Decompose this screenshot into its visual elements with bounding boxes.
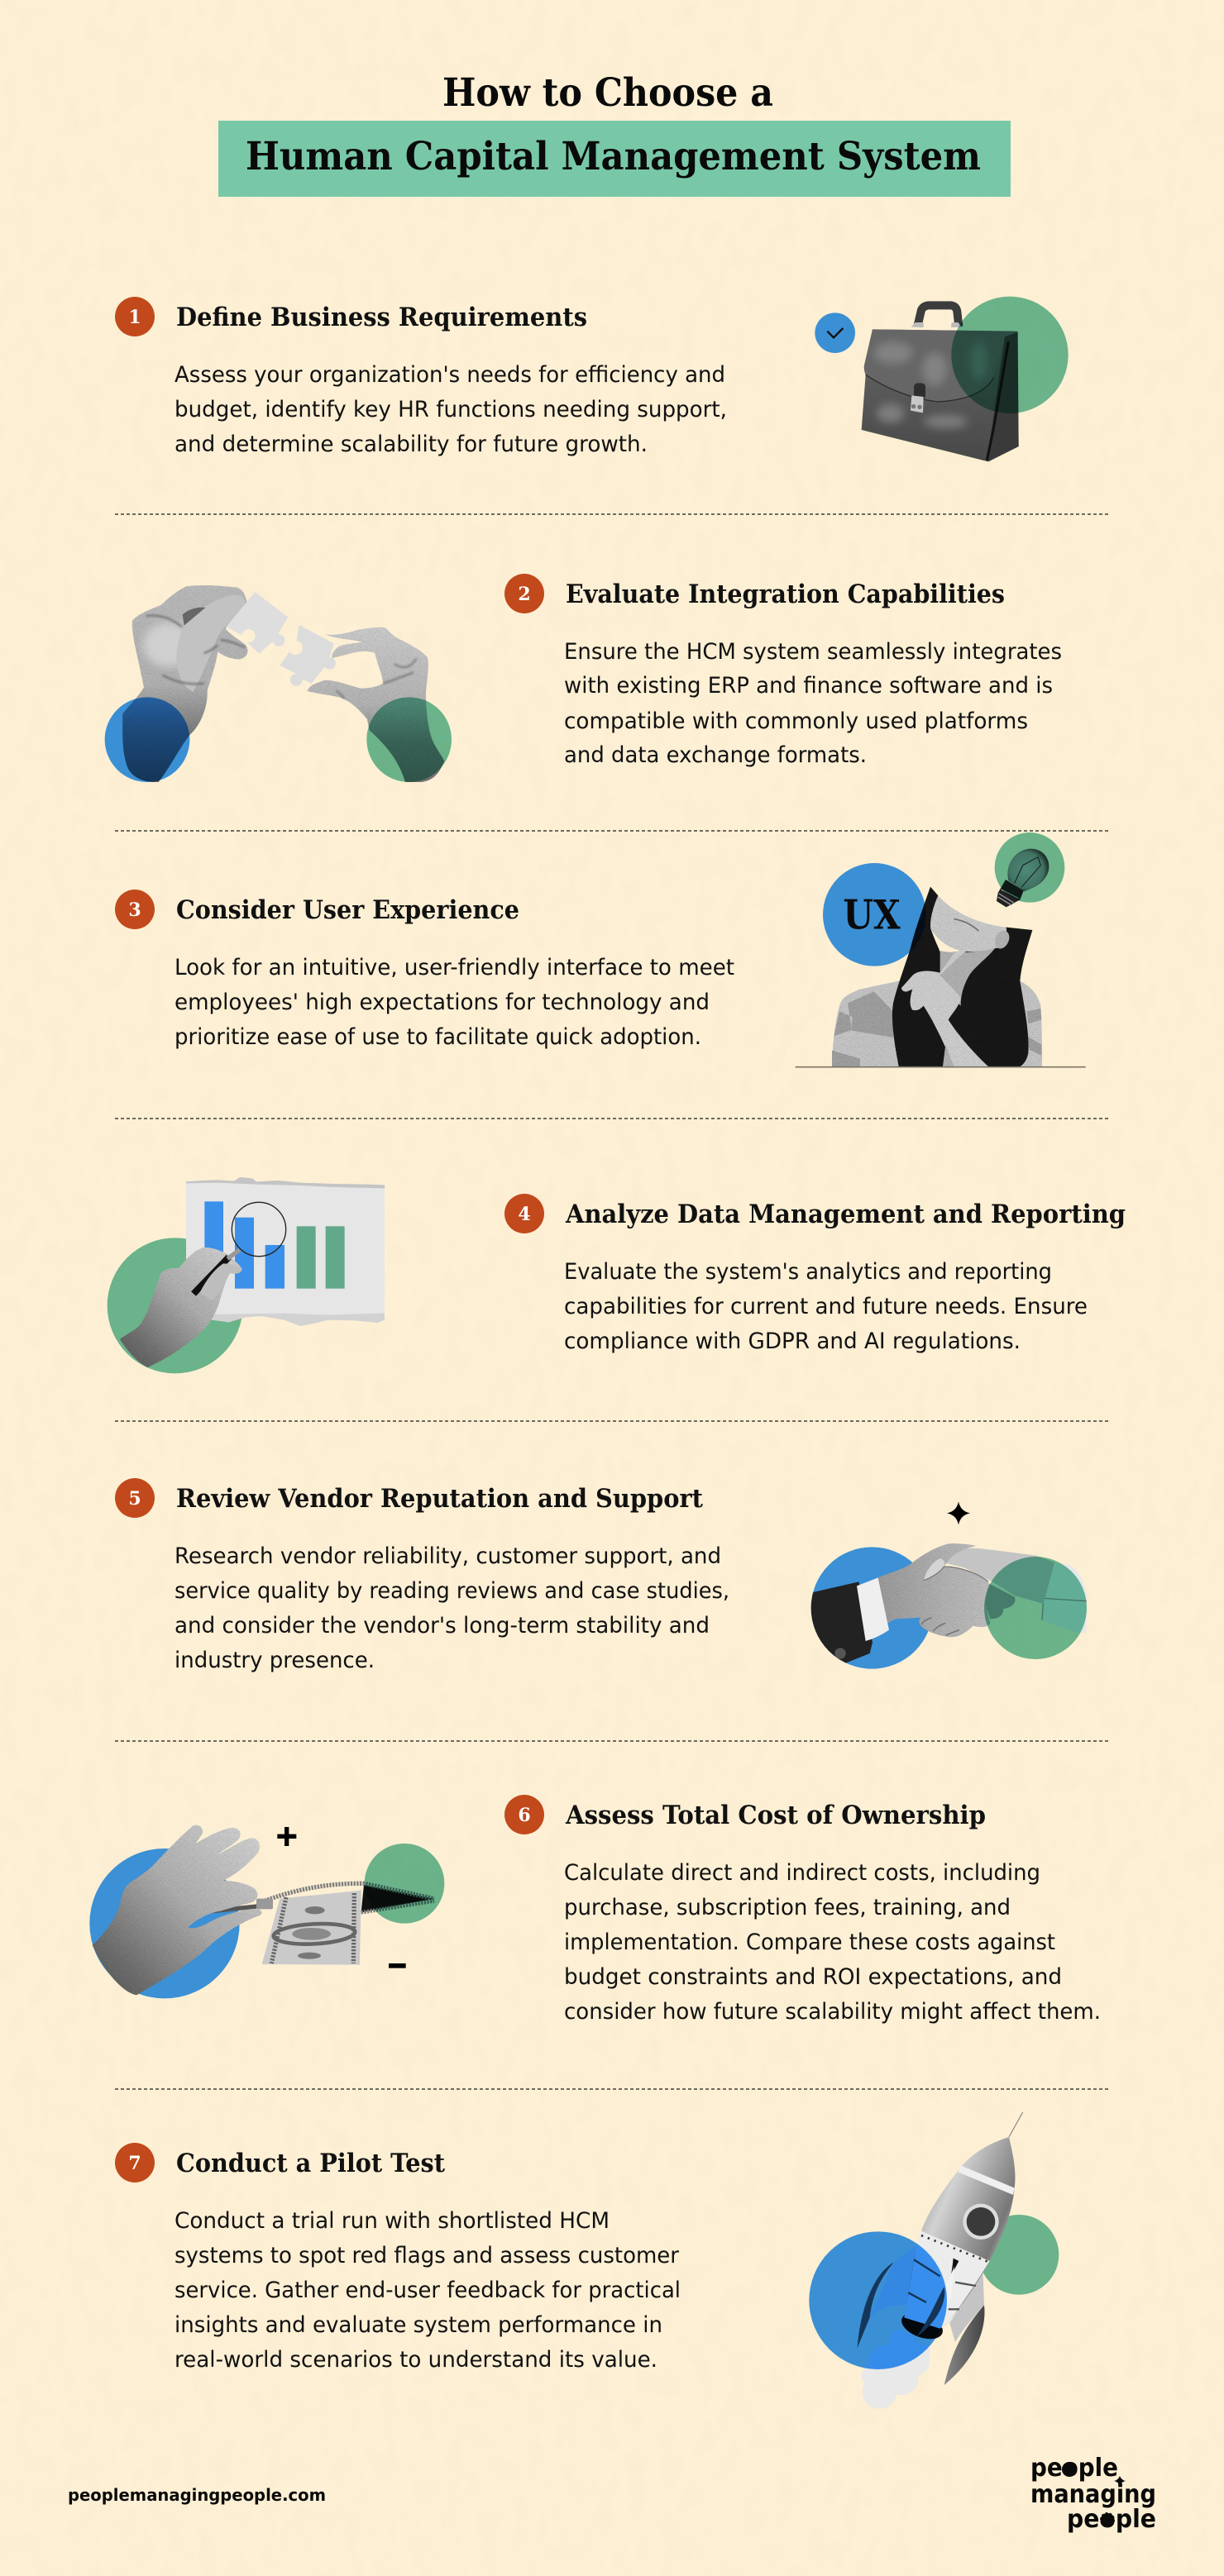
heading step 6: Assess Total Cost of Ownership xyxy=(565,1801,986,1830)
number badge 4 xyxy=(504,1194,544,1233)
illustration: rocket launching xyxy=(809,2112,1059,2409)
heading step 2: Evaluate Integration Capabilities xyxy=(566,580,1005,609)
illustration: two hands joining puzzle pieces xyxy=(105,585,452,782)
illustration: hand unzipping money xyxy=(89,1825,444,1998)
body text step 1: and determine scalability for future growth. xyxy=(175,432,648,457)
body text step 7: real-world scenarios to understand its value. xyxy=(175,2347,657,2373)
body text step 6 xyxy=(564,1860,1101,2025)
heading step 3: Consider User Experience xyxy=(176,895,519,925)
body text step 6: purchase, subscription fees, training, and xyxy=(564,1895,1011,1920)
illustration: briefcase with check badge xyxy=(815,297,1069,461)
logo: people managing people xyxy=(1030,2454,1156,2534)
divider xyxy=(115,830,1111,832)
body text step 7: service. Gather end-user feedback for practical xyxy=(175,2278,681,2303)
panel: step 2 evaluate integration capabilities xyxy=(105,574,1062,782)
number badge 7 xyxy=(115,2143,155,2182)
body text step 6: implementation. Compare these costs against xyxy=(564,1930,1055,1955)
body text step 7: Conduct a trial run with shortlisted HCM xyxy=(175,2208,610,2234)
number badge 1: 1 xyxy=(128,307,141,328)
divider xyxy=(115,1118,1111,1119)
logo: people managing people: people xyxy=(1067,2505,1156,2534)
body text step 7 xyxy=(175,2208,681,2373)
panel: step 1 define business requirements xyxy=(115,297,1069,461)
body text step 6: budget constraints and ROI expectations, and xyxy=(564,1964,1062,1990)
heading step 1: Define Business Requirements xyxy=(176,303,587,332)
divider xyxy=(115,2088,1111,2090)
heading step 4: Analyze Data Management and Reporting xyxy=(565,1200,1126,1229)
logo: people managing people: managing xyxy=(1030,2480,1156,2509)
divider xyxy=(115,513,1111,515)
title line one: How to Choose a xyxy=(442,70,773,116)
body text step 1: Assess your organization's needs for efficiency and xyxy=(175,362,725,388)
body text step 5: Research vendor reliability, customer support, and xyxy=(175,1543,721,1569)
number badge 6: 6 xyxy=(518,1805,531,1826)
number badge 3: 3 xyxy=(128,899,141,921)
minus sign xyxy=(389,1963,406,1968)
number badge 5: 5 xyxy=(128,1488,141,1510)
body text step 2: compatible with commonly used platforms xyxy=(564,708,1028,734)
illustration: handshake xyxy=(805,1501,1087,1669)
title xyxy=(218,70,1011,197)
number badge 3 xyxy=(115,890,155,929)
body text step 2: and data exchange formats. xyxy=(564,742,867,768)
body text step 3: Look for an intuitive, user-friendly interface to meet xyxy=(175,955,734,980)
body text step 2: with existing ERP and finance software and is xyxy=(564,673,1053,699)
light bulb xyxy=(997,849,1049,907)
body text step 3: employees' high expectations for technology and xyxy=(175,990,710,1015)
body text step 5 xyxy=(175,1543,729,1673)
footer website text: peoplemanagingpeople.com xyxy=(68,2485,326,2505)
body text step 6: consider how future scalability might affect them. xyxy=(564,1999,1101,2025)
panel: step 6 assess total cost of ownership xyxy=(89,1795,1101,2025)
body text step 7: insights and evaluate system performance in xyxy=(175,2312,662,2338)
body text step 2 xyxy=(564,639,1062,768)
body text step 3 xyxy=(175,955,734,1050)
plus sign xyxy=(277,1827,296,1846)
body text step 4 xyxy=(564,1259,1088,1354)
title highlight band: Human Capital Management System xyxy=(246,134,981,179)
heading step 5: Review Vendor Reputation and Support xyxy=(176,1484,704,1514)
number badge 6 xyxy=(504,1795,544,1834)
number badge 2 xyxy=(504,574,544,613)
body text step 3: prioritize ease of use to facilitate quick adoption. xyxy=(175,1024,701,1050)
body text step 5: service quality by reading reviews and case studies, xyxy=(175,1578,729,1604)
body text step 1: budget, identify key HR functions needing support, xyxy=(175,397,727,422)
number badge 4: 4 xyxy=(518,1204,531,1225)
body text step 5: and consider the vendor's long-term stability and xyxy=(175,1613,710,1639)
illustration: thinking woman with UX badge and light bulb xyxy=(796,832,1086,1067)
body text step 4: capabilities for current and future needs. Ensure xyxy=(564,1294,1088,1319)
number badge 1 xyxy=(115,297,155,336)
body text step 1 xyxy=(175,362,727,457)
heading step 7: Conduct a Pilot Test xyxy=(176,2149,446,2178)
divider xyxy=(115,1420,1111,1422)
body text step 4: Evaluate the system's analytics and reporting xyxy=(564,1259,1052,1285)
panel: step 4 analyze data management and reporting xyxy=(108,1177,1126,1373)
title highlight band xyxy=(218,121,1011,197)
bar chart xyxy=(204,1201,345,1289)
number badge 5 xyxy=(115,1478,155,1518)
illustration: thinking woman with UX badge and light bulb: UX xyxy=(843,891,901,938)
panel: step 7 conduct a pilot test xyxy=(115,2112,1059,2409)
panel: step 5 review vendor reputation and support xyxy=(115,1478,1087,1673)
body text step 4: compliance with GDPR and AI regulations. xyxy=(564,1329,1021,1354)
logo: people managing people: people xyxy=(1030,2454,1118,2483)
number badge 2: 2 xyxy=(518,584,531,605)
divider xyxy=(115,1740,1111,1742)
far hand and right sleeve xyxy=(932,1548,1087,1633)
body text step 7: systems to spot red flags and assess customer xyxy=(175,2243,679,2268)
body text step 2: Ensure the HCM system seamlessly integrates xyxy=(564,639,1062,665)
number badge 7: 7 xyxy=(128,2153,141,2174)
illustration: hand with magnifier over bar chart xyxy=(108,1177,385,1373)
body text step 5: industry presence. xyxy=(175,1648,375,1673)
body text step 6: Calculate direct and indirect costs, including xyxy=(564,1860,1040,1886)
panel: step 3 consider user experience xyxy=(115,832,1086,1067)
